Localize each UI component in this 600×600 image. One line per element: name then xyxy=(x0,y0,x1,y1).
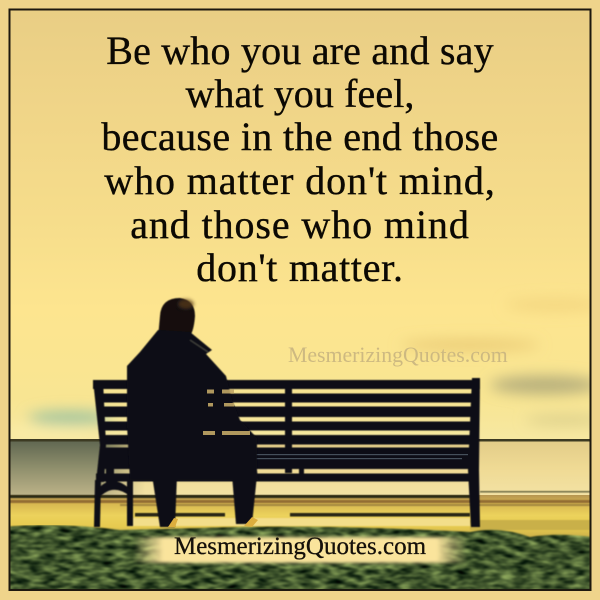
hair highlight xyxy=(178,299,194,309)
quote text: don't matter. xyxy=(196,245,404,290)
bench uprights xyxy=(93,380,106,482)
sky xyxy=(0,0,600,442)
tan gaps seen through coat xyxy=(203,390,250,435)
grass xyxy=(0,525,600,600)
sea xyxy=(0,440,600,496)
coat collar highlight xyxy=(190,340,208,352)
footer website label: MesmerizingQuotes.com xyxy=(174,533,426,560)
sand streaks xyxy=(0,491,600,530)
beach sand xyxy=(0,495,600,540)
quote text xyxy=(101,28,499,290)
head xyxy=(158,298,195,338)
quote text: and those who mind xyxy=(130,202,470,247)
bench xyxy=(93,378,480,527)
footer glow band xyxy=(133,537,467,563)
sea darker left side xyxy=(10,442,140,495)
quote text: who matter don't mind, xyxy=(104,158,496,203)
bench slats xyxy=(93,380,480,482)
bluish lines in low slat xyxy=(222,454,468,459)
quote text: Be who you are and say xyxy=(106,28,494,73)
watermark: MesmerizingQuotes.com xyxy=(288,343,508,367)
legs xyxy=(152,475,177,527)
quote text: what you feel, xyxy=(185,71,415,116)
horizon line xyxy=(0,439,600,442)
clouds xyxy=(0,299,600,436)
seated figure xyxy=(127,298,258,527)
coat body xyxy=(127,330,258,480)
shoes xyxy=(168,517,258,527)
quote text: because in the end those xyxy=(101,114,499,159)
bench left iron legs xyxy=(94,480,101,527)
